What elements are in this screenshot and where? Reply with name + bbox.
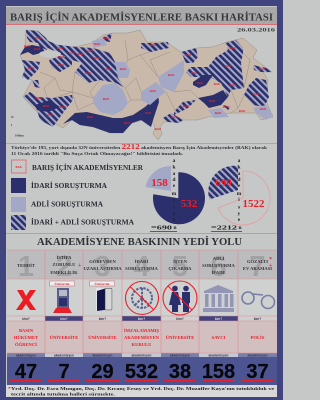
pie chart: 690: m (172, 191, 177, 197)
legend: BAK signatories: BAK (15, 165, 23, 169)
BAK province labels: BAK (47, 113, 54, 117)
icon: open university door: Üniversite (95, 281, 110, 286)
victim counts (15, 361, 269, 383)
pie chart: 690: y (173, 211, 176, 217)
pie chart: 2212: n (238, 225, 242, 231)
method labels: İDARİ (135, 259, 148, 264)
method labels: SORUŞTURMA (125, 266, 159, 271)
BAK province labels: BAK (24, 44, 31, 48)
BAK province labels: BAK (215, 111, 222, 115)
method labels: ZORUNLU (53, 262, 76, 267)
pie chart: 690: i (173, 197, 175, 203)
step numbers: 2 (56, 251, 72, 283)
legend: BAK signatories (12, 160, 143, 173)
BAK province labels: BAK (58, 55, 65, 59)
map compass and scale: i (11, 123, 12, 127)
icon: red X (16, 290, 36, 310)
pie chart: 690: a (173, 158, 176, 164)
footnote: *Yrd. Doç. Dr. Esra Mungan, Doç. Dr. Kıvanç Ersoy ve Yrd. Doç. Dr. Muzaffer Kaya'nın tutuklukluk ve (8, 386, 274, 391)
who strip: kim? (22, 317, 30, 321)
legend: BAK signatories: BARIŞ İÇİN AKADEMİSYENLER (32, 162, 143, 172)
academic strip: akademisyen (247, 353, 268, 357)
legend: administrative: İDARİ SORUŞTURMA (31, 182, 107, 190)
BAK province labels: BAK (104, 36, 111, 40)
seven ways table (7, 250, 277, 385)
intro text: 11 Ocak 2016 tarihli "Bu Suça Ortak Olmayacağız!" bildirisini imzaladı. (11, 151, 183, 156)
icon: open university door (90, 281, 114, 311)
province borders (40, 40, 250, 113)
academic strip: akademisyen (170, 353, 190, 357)
perpetrators: KURULU (132, 342, 152, 347)
map compass and scale: N (11, 115, 14, 119)
BAK province labels: BAK (94, 56, 101, 60)
step numbers: 5 (172, 251, 188, 283)
base silhouette (20, 30, 273, 140)
map compass and scale (11, 115, 24, 138)
method labels (17, 255, 272, 275)
BAK province labels: BAK (150, 89, 157, 93)
BAK province labels: BAK (260, 107, 267, 111)
academic strip (7, 353, 277, 357)
victim counts: 532 (125, 361, 158, 383)
pie chart: 2212: y (238, 211, 241, 217)
investigation regions: administrative (20, 45, 228, 133)
BAK province labels: BAK (150, 43, 157, 47)
BAK province labels: BAK (168, 73, 175, 77)
perpetrators (14, 328, 265, 347)
Marmara sea (39, 50, 61, 58)
method labels: SORUŞTURMA (202, 263, 236, 268)
pie chart: 2212: m (237, 191, 242, 197)
BAK province labels: BAK (155, 127, 162, 131)
pie chart: 2212 (208, 158, 270, 232)
BAK province labels: BAK (58, 63, 65, 67)
red plus marks (78, 257, 273, 269)
BAK province labels: BAK (259, 67, 266, 71)
who strip: kim? (215, 317, 222, 321)
academic strip: akademisyen (92, 353, 113, 357)
perpetrators: İMZALAMAMIŞ (124, 328, 160, 333)
perpetrators: ÜNİVERSİTE (50, 335, 78, 340)
intro text (6, 142, 277, 156)
BAK province labels: BAK (145, 111, 152, 115)
who strip: kim? (176, 317, 184, 321)
pie chart: 2212: d (238, 177, 240, 183)
BAK province labels: BAK (57, 46, 64, 50)
academic strip: akademisyen (131, 353, 152, 357)
BAK province labels (24, 36, 267, 131)
investigation regions: combined (22, 30, 273, 127)
BAK province labels: BAK (223, 105, 230, 109)
pie chart: 2212: i (238, 197, 240, 203)
method labels: İSTİFA (57, 255, 72, 260)
pie chart: 2212: k (238, 164, 240, 170)
perpetrators: AKADEMİSYEN (124, 335, 160, 340)
icon: courthouse (203, 285, 234, 312)
map of Turkey (20, 30, 273, 140)
victim counts: 37 (246, 361, 269, 383)
pie chart: 690: s (173, 204, 175, 210)
who strip: kim? (138, 317, 145, 321)
BAK province labels: BAK (230, 83, 237, 87)
who strip: kim? (99, 317, 106, 321)
victim counts: 47 (15, 361, 37, 383)
pie chart: 690: n (174, 225, 176, 231)
BAK province labels: BAK (34, 47, 41, 51)
BAK province labels: BAK (124, 121, 131, 125)
step numbers: 4 (133, 251, 150, 283)
victim counts: 158 (202, 361, 235, 383)
BAK province labels: BAK (197, 81, 204, 85)
who strip: kim? (254, 317, 261, 321)
who strip: kim? (60, 317, 68, 321)
perpetrators: BASIN (19, 328, 34, 333)
BAK province labels: BAK (87, 115, 94, 119)
BAK province labels: BAK (36, 96, 43, 100)
BAK province labels: BAK (60, 105, 67, 109)
perpetrators: ÜNİVERSİTE (88, 335, 117, 340)
title (6, 7, 277, 25)
footnote: tecrit altında tutulma halleri sürmekte. (11, 392, 115, 396)
perpetrators: POLİS (251, 335, 265, 340)
icon: crossed people (163, 281, 197, 315)
section heading: AKADEMİSYENE BASKININ YEDİ YOLU (37, 236, 242, 248)
pie chart: 690: =690 (151, 224, 172, 232)
count underlines (10, 380, 274, 381)
BAK province labels: BAK (171, 115, 178, 119)
method labels: EV ARAMASI (243, 266, 272, 271)
victim counts: 7 (58, 361, 70, 383)
perpetrators: HÜKÜMET (14, 335, 38, 340)
BAK province labels: BAK (214, 82, 221, 86)
icon: closed university door (50, 281, 74, 313)
method labels: İŞTEN (173, 259, 188, 264)
step numbers (18, 251, 266, 283)
method labels: İFADE (212, 270, 225, 275)
pie chart: 690: 532 (181, 198, 198, 210)
step numbers: 6 (210, 251, 227, 283)
step numbers: 7 (249, 251, 266, 283)
BAK province labels: BAK (43, 104, 50, 108)
pie chart: 2212: a (238, 171, 241, 177)
icon: crossed peace sign (126, 282, 158, 314)
BAK province labels: BAK (28, 66, 35, 70)
pie chart: 2212: 1522 (242, 198, 265, 210)
pie chart: 2212: a (238, 158, 241, 164)
date: 26.03.2016 (237, 28, 275, 34)
legend (11, 160, 143, 230)
BAK province labels: BAK (209, 99, 216, 103)
step numbers: 1 (18, 251, 34, 283)
red plus marks: + (78, 263, 82, 269)
BAK province labels: BAK (120, 67, 127, 71)
pie chart: 2212: =2212 (211, 224, 237, 232)
perpetrators: ÜNİVERSİTE (166, 335, 194, 340)
legend: combined: İDARİ + ADLİ SORUŞTURMA (31, 218, 134, 226)
pie chart: 2212: s (238, 204, 240, 210)
pie chart: 690: k (172, 164, 176, 170)
academic strip: akademisyen (54, 353, 74, 357)
legend: judicial: ADLİ SORUŞTURMA (31, 200, 103, 208)
BAK province labels: BAK (78, 52, 85, 56)
step numbers: 3 (94, 251, 111, 283)
BAK province labels: BAK (85, 71, 92, 75)
BAK province labels: BAK (69, 51, 76, 55)
red plus marks: * (269, 257, 272, 263)
BAK province labels: BAK (94, 42, 101, 46)
pie chart: 2212: e (238, 183, 241, 189)
pie chart: 2212: e (238, 217, 241, 223)
BAK province labels: BAK (230, 46, 237, 50)
pie chart: 2212: 690 (215, 177, 232, 189)
map compass and scale: 100km (15, 134, 24, 138)
pie chart: 690 (146, 158, 205, 232)
pie chart: 690: a (173, 171, 176, 177)
BAK province labels: BAK (191, 71, 198, 75)
BAK province labels: BAK (183, 104, 190, 108)
BAK province labels: BAK (185, 53, 192, 57)
pie chart: 690: e (173, 217, 176, 223)
red plus marks: + (269, 263, 273, 269)
BAK province labels: BAK (87, 49, 94, 53)
method labels: TEHDİT (17, 263, 35, 268)
method labels: GÖZALTI (247, 259, 268, 264)
method labels: GÖREVDEN (89, 259, 116, 264)
BAK province labels: BAK (103, 97, 110, 101)
table row backgrounds (7, 250, 277, 385)
method labels: UZAKLAŞTIRMA (83, 266, 122, 271)
icon: handcuffs (242, 292, 274, 308)
academic strip: akademisyen (16, 353, 36, 357)
intro text: Türkiye'de 195, yurt dışında 32N üniversiteden 2212 akademisyen Barış İçin Akademisyenler (BAK) olarak (11, 142, 268, 151)
title: BARIŞ İÇİN AKADEMİSYENLERE BASKI HARİTASI (10, 12, 273, 24)
icon: closed university door: Üniversite (55, 281, 70, 286)
method labels: EMEKLİLİK (50, 270, 78, 275)
pie chart: 690: 158 (151, 177, 168, 189)
BAK province labels: BAK (239, 109, 246, 113)
BAK province labels: BAK (106, 67, 113, 71)
BAK province labels: BAK (225, 64, 232, 68)
pie chart: 690: e (173, 183, 176, 189)
perpetrators: SAVCI (212, 335, 226, 340)
method labels: ÇIKARMA (169, 266, 192, 271)
table grid (7, 250, 277, 353)
victim counts: 29 (91, 361, 114, 383)
footnote (6, 385, 277, 397)
pie chart: 690: d (172, 177, 176, 183)
who strip (7, 316, 277, 321)
perpetrators: ÖĞRENCİ (15, 342, 37, 347)
victim counts: 38 (169, 361, 191, 383)
investigation regions: judicial (92, 38, 273, 120)
BAK province labels: BAK (253, 92, 260, 96)
academic strip: akademisyen (208, 353, 229, 357)
BAK province labels: BAK (35, 36, 42, 40)
method labels: ADLİ (213, 256, 224, 261)
